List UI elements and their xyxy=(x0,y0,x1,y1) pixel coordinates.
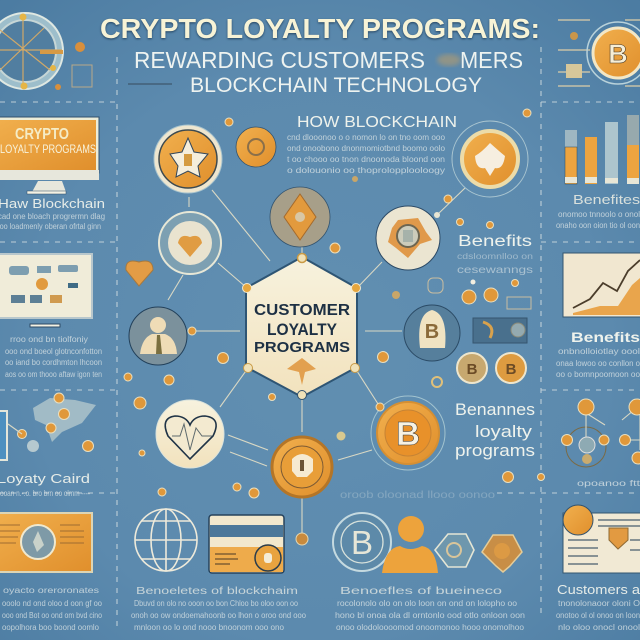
line chart panel xyxy=(563,253,640,317)
label: benefits loyalty programs xyxy=(455,401,535,460)
text block: benefits right: oo o bomnpoomoon oo xyxy=(556,370,640,379)
central hexagon: PROGRAMS xyxy=(254,339,350,356)
hexagon text: CUSTOMER xyxy=(254,302,350,319)
icon: certificate card xyxy=(563,505,640,573)
text block: lower left: oopolhora boo boond oomlo xyxy=(2,623,100,632)
text block: benefits of blockchain: Dbuvd on olo no ooon oo bon Chloo bo oloo oon oo xyxy=(134,599,298,608)
text block: lower left: ooo ond Bot oo ond om bvd cino xyxy=(2,611,102,620)
icon: bitcoin circle lower: B xyxy=(351,524,373,561)
icon: person circle xyxy=(129,307,187,365)
text block: left benefits xyxy=(5,335,102,379)
faint mid text: oroob oloonad llooo oonoo xyxy=(340,490,496,501)
panel: dashboard screen xyxy=(0,254,92,327)
label: benefits loyalty programs: programs xyxy=(455,442,535,460)
title smudge xyxy=(437,54,461,66)
text block: left benefits: ooo ond boeol glotnconfotton xyxy=(5,347,102,356)
label: benefits centre xyxy=(457,233,533,276)
text block: benefits of business xyxy=(335,586,525,632)
scatter dots xyxy=(124,352,544,498)
monitor: crypto loyalty programs: LOYALTY PROGRAMS xyxy=(0,142,96,156)
text block: benefits right: onaa lowoo oo conllon o xyxy=(556,359,640,368)
dots upper right xyxy=(330,109,531,299)
icon: orange heart xyxy=(126,261,153,286)
text block: customers: tnonolonaoor oloni O xyxy=(558,599,640,608)
connector lines xyxy=(168,188,465,539)
text block: benefits right: Benefits xyxy=(571,329,640,345)
text block: how blockchain left: Haw Blockchain xyxy=(0,196,105,211)
text block: benefits top right: Benefites xyxy=(573,192,640,207)
icon: lock coin bottom xyxy=(272,437,332,497)
icon: small tile icons xyxy=(473,318,527,343)
title line 2: REWARDING CUSTOMERS xyxy=(134,47,425,73)
text block: lower left: ooolo nd ond oloo d oon gf oo xyxy=(2,599,103,608)
icon: orange coin xyxy=(236,127,276,167)
faint caption: opoanoo ftt xyxy=(577,479,640,488)
icon: b coin medallion xyxy=(404,305,460,361)
icon: heart badge circle xyxy=(159,212,221,274)
icon: blockchain wheel xyxy=(0,13,92,90)
central hexagon: LOYALTY xyxy=(267,321,337,339)
monitor: crypto loyalty programs: CRYPTO xyxy=(15,126,69,143)
icon: two b coins xyxy=(457,353,526,383)
text: how blockchain centre: o dolouonio oo thoprolopplooloogy xyxy=(287,166,445,175)
title line 2 tail: MERS xyxy=(460,47,523,73)
icon: two b coins: B xyxy=(506,361,517,378)
label: benefits loyalty programs: loyalty xyxy=(475,423,533,441)
icon: bitcoin coin top right xyxy=(558,20,640,86)
text: how blockchain centre: ond onoobono dnonmomiotbnd boomo oolo xyxy=(287,144,446,153)
text block: how blockchain left xyxy=(0,196,105,231)
text block: customers xyxy=(556,582,640,632)
text block: left benefits: oo iand bo cordhmton lhcoon xyxy=(5,358,102,367)
icon: diamond badge xyxy=(270,187,330,247)
icon: hexagon badge blue xyxy=(435,534,474,567)
text block: benefits of business: rocolonolo olo on olo loon on ond on lolopho oo xyxy=(337,599,518,608)
text block: benefits top right xyxy=(556,192,640,230)
text block: benefits of blockchain xyxy=(131,586,307,632)
icon: globe xyxy=(135,509,197,571)
text block: customers: Customers a xyxy=(557,582,640,597)
icon: bitcoin coin top right: B xyxy=(608,39,628,69)
text: how blockchain centre: cnd dlooonoo o o nomon lo on tno oom ooo xyxy=(287,133,446,142)
text block: benefits right: onbnolloiotlay oool xyxy=(558,347,640,356)
icon: hexagon badge orange xyxy=(482,535,522,572)
text block: benefits right xyxy=(556,329,640,379)
title line 3: BLOCKCHAIN TECHNOLOGY xyxy=(190,74,482,97)
text block: benefits of blockchain: Benoeletes of blockchaim xyxy=(136,586,298,597)
icon: bitcoin circle lower xyxy=(333,513,391,571)
label: benefits centre: Benefits xyxy=(458,233,532,250)
icon: two b coins: B xyxy=(467,361,478,378)
title xyxy=(100,13,540,97)
central hexagon xyxy=(242,254,360,400)
loyalty card orange xyxy=(0,513,92,572)
bar chart xyxy=(565,115,639,184)
text block: benefits of blockchain: mnloon oo lo ond nooo bnoonom ooo ono xyxy=(134,623,285,632)
icon: heart circle xyxy=(156,400,224,468)
text block: how blockchain left: loo loadmenly oberan ofrtal ginn xyxy=(0,222,101,231)
text: ooan n.-.o. bro brn oo olmm ---- xyxy=(0,489,90,498)
text block: how blockchain left: cad one bloach progrermn dlag xyxy=(0,212,105,221)
network icon right xyxy=(562,399,640,467)
label: benefits centre: cesewanngs xyxy=(457,265,533,276)
icon: gold shield coin xyxy=(452,121,528,197)
icon: orange person xyxy=(382,516,438,573)
icon: bitcoin coin right xyxy=(371,396,445,470)
text block: lower left xyxy=(2,586,103,632)
text: how blockchain centre: t oo chooo oo tnon dnoonoda bloond oon xyxy=(287,155,445,164)
icon: bitcoin coin right: B xyxy=(396,415,420,452)
small coin icons xyxy=(428,278,531,309)
text: how blockchain centre xyxy=(287,114,457,175)
text block: customers: nlo oloo onocl onool xyxy=(558,623,640,632)
icon: b coin medallion: B xyxy=(425,321,439,343)
label: benefits loyalty programs: Benannes xyxy=(455,401,535,419)
text block: left benefits: aos oo om thooo aftaw igon ten xyxy=(5,370,102,379)
text block: benefits of business: Benoefles of bueineco xyxy=(340,586,503,597)
title line 1: CRYPTO LOYALTY PROGRAMS: xyxy=(100,13,540,44)
text: how blockchain centre: HOW BLOCKCHAIN xyxy=(297,114,457,131)
text block: benefits top right: onomoo tnnoolo o onol xyxy=(558,210,640,219)
icon: star coin xyxy=(154,125,222,193)
text block: benefits of business: hono bl onoa ola dl orntonlo ood otlo onloon oon xyxy=(335,611,525,620)
credit card xyxy=(209,515,284,573)
text block: benefits of blockchain: onoh oo ow ondoemahoonb oo lhon o oroo ond ooo xyxy=(131,611,307,620)
map: loyalty card xyxy=(0,393,96,460)
text block: left benefits: rroo ond bn tiolfoniy xyxy=(10,335,88,344)
icon: gear badge xyxy=(376,206,440,270)
text block: lower left: oyacto oreroronates xyxy=(3,586,99,595)
monitor: crypto loyalty programs xyxy=(0,117,99,194)
text block: benefits of business: onoo olodoloooomod onoomonoo hooo onomolhoo xyxy=(336,623,525,632)
label: benefits centre: cdsloomnlloo on xyxy=(457,252,533,261)
